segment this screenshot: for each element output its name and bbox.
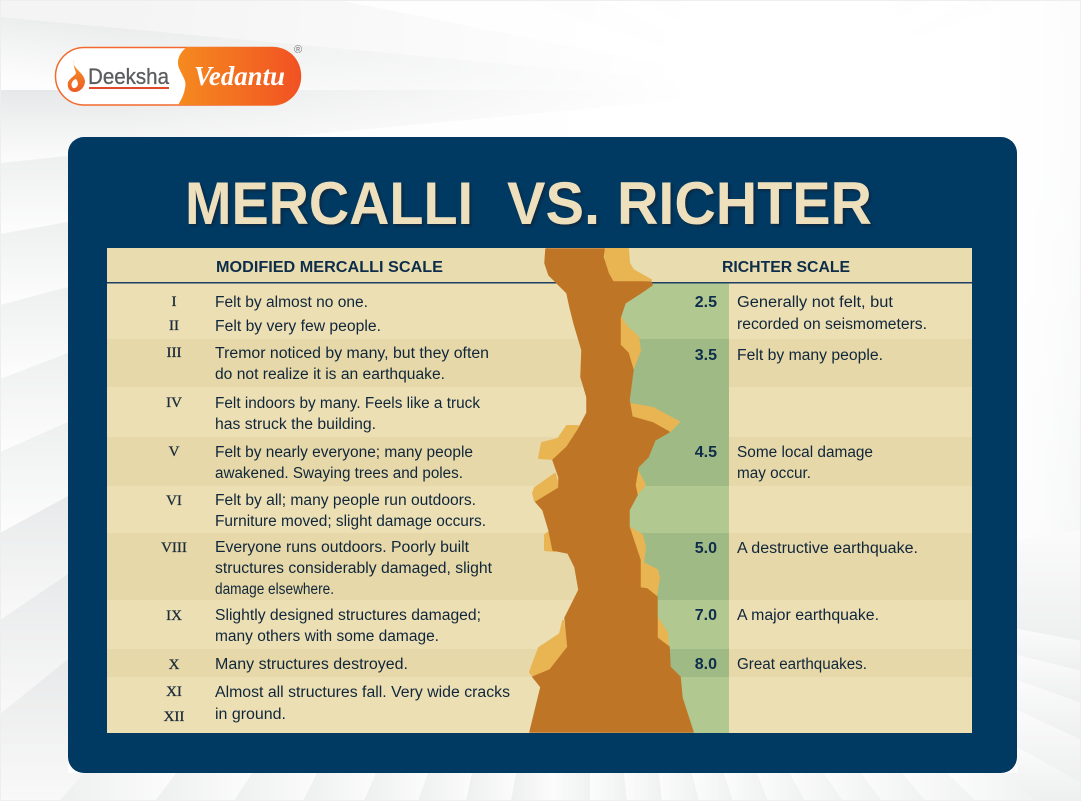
logo orange half (178, 47, 301, 105)
Mercalli descriptions: Everyone runs outdoors. Poorly built (215, 539, 470, 556)
title (185, 170, 872, 237)
Richter descriptions: may occur. (737, 465, 811, 482)
comparison table (107, 248, 972, 733)
Richter magnitudes: 8.0 (695, 656, 717, 673)
Mercalli descriptions: has struck the building. (215, 416, 376, 433)
Mercalli descriptions: Felt indoors by many. Feels like a truck (215, 395, 480, 412)
Mercalli descriptions: Furniture moved; slight damage occurs. (215, 513, 486, 530)
Mercalli descriptions: Felt by almost no one. (215, 294, 368, 311)
logo flame icon (68, 60, 85, 92)
Mercalli descriptions: do not realize it is an earthquake. (215, 366, 445, 383)
Richter descriptions (737, 294, 927, 673)
Mercalli numerals (161, 294, 187, 725)
Richter magnitudes: 2.5 (695, 294, 717, 311)
Mercalli descriptions: in ground. (215, 706, 286, 723)
logo Deeksha wordmark: Deeksha (88, 64, 170, 89)
title: MERCALLI (185, 170, 473, 237)
Mercalli numerals: VI (166, 493, 182, 509)
Richter descriptions: Some local damage (737, 444, 873, 461)
Richter green band (600, 283, 729, 733)
left strip wedges (0, 156, 68, 533)
header rule (107, 282, 972, 284)
Mercalli descriptions: many others with some damage. (215, 628, 439, 645)
Mercalli descriptions: awakened. Swaying trees and poles. (215, 465, 463, 482)
Mercalli numerals: I (172, 294, 176, 310)
Richter descriptions: Generally not felt, but (737, 294, 894, 311)
title: RICHTER (617, 170, 872, 237)
logo: Deeksha Vedantu (56, 44, 302, 105)
Mercalli descriptions: Felt by nearly everyone; many people (215, 444, 473, 461)
Richter column heading: RICHTER SCALE (722, 259, 850, 276)
Richter descriptions: Felt by many people. (737, 347, 883, 364)
Mercalli numerals: II (169, 318, 179, 334)
Richter descriptions: Great earthquakes. (737, 656, 867, 673)
Mercalli numerals: X (169, 657, 180, 673)
Mercalli descriptions: Tremor noticed by many, but they often (215, 345, 489, 362)
main panel (68, 137, 1017, 773)
Mercalli column heading: MODIFIED MERCALLI SCALE (216, 259, 443, 276)
crack highlight pieces (530, 249, 679, 676)
logo registered mark: ® (294, 44, 302, 56)
Mercalli numerals: IV (166, 395, 182, 411)
Mercalli numerals: III (166, 345, 182, 361)
Mercalli descriptions (215, 294, 510, 723)
Richter descriptions: A destructive earthquake. (737, 540, 918, 557)
Mercalli descriptions: Felt by all; many people run outdoors. (215, 492, 476, 509)
logo Vedantu wordmark: Vedantu (194, 61, 285, 91)
top-right faint rays (524, 0, 1010, 90)
Mercalli numerals: V (169, 444, 180, 460)
Richter descriptions: recorded on seismometers. (737, 316, 927, 333)
table header band (107, 248, 972, 282)
top-left wedges (0, 0, 790, 90)
Mercalli numerals: VIII (161, 540, 187, 556)
Mercalli numerals: XII (164, 709, 184, 725)
Mercalli descriptions: Almost all structures fall. Very wide cracks (215, 684, 510, 701)
crack body (530, 249, 693, 732)
Mercalli numerals: XI (166, 684, 182, 700)
Richter magnitudes: 4.5 (695, 444, 717, 461)
Richter magnitudes: 5.0 (695, 540, 717, 557)
Richter magnitudes (695, 294, 717, 673)
Mercalli descriptions: Slightly designed structures damaged; (215, 607, 481, 624)
logo underline (89, 87, 169, 89)
table base (107, 248, 972, 733)
Mercalli descriptions: Many structures destroyed. (215, 656, 408, 673)
Mercalli numerals: IX (166, 608, 182, 624)
title: VS. (507, 170, 600, 237)
bottom strip wedges (59, 773, 554, 801)
Mercalli descriptions: damage elsewhere. (215, 581, 334, 598)
right strip wedges (1002, 530, 1081, 801)
Mercalli descriptions: Felt by very few people. (215, 318, 381, 335)
Richter magnitudes: 3.5 (695, 347, 717, 364)
Richter descriptions: A major earthquake. (737, 607, 879, 624)
alternating row bands (107, 339, 972, 677)
fault crack illustration (530, 249, 693, 732)
Mercalli descriptions: structures considerably damaged, slight (215, 560, 493, 577)
Richter magnitudes: 7.0 (695, 607, 717, 624)
